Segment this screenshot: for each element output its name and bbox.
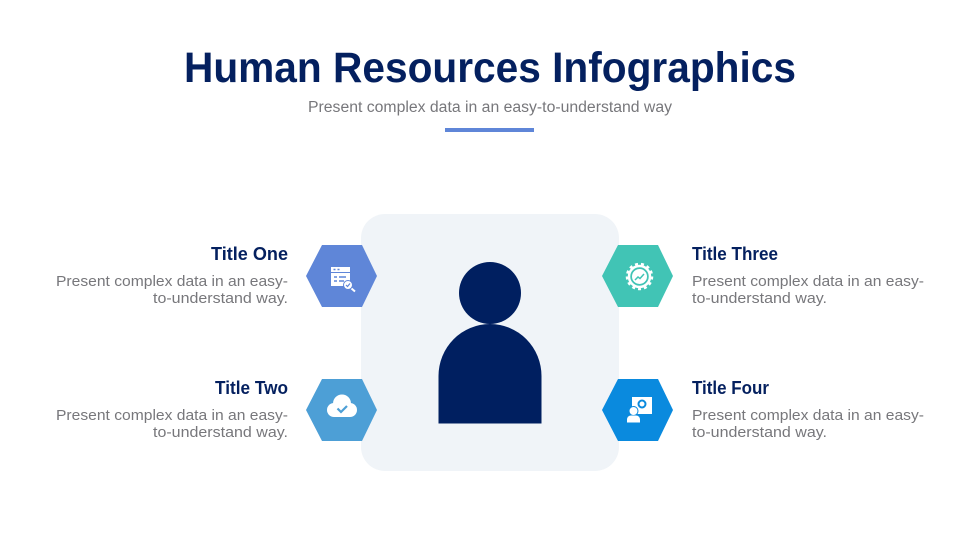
heading: Title Four: Title Four — [692, 378, 769, 398]
text: description one — [56, 273, 288, 307]
block: Title Three — [692, 244, 924, 307]
text: description one: to-understand way. — [153, 290, 288, 307]
text: description four — [692, 407, 924, 441]
text: description three: Present complex data in an easy- — [692, 273, 924, 290]
text: description four: Present complex data in an easy- — [692, 407, 924, 424]
icon: person — [438, 262, 542, 424]
heading: Title One: Title One — [211, 244, 288, 264]
block: Title One — [56, 244, 288, 307]
subtitle: Present complex data in an easy-to-understand way — [308, 99, 672, 116]
text: description one: Present complex data in an easy- — [56, 273, 288, 290]
heading: Title Three: Title Three — [692, 244, 778, 264]
text: description two: to-understand way. — [153, 424, 288, 441]
title: Human Resources Infographics — [184, 44, 796, 92]
text: description three — [692, 273, 924, 307]
heading: Title Two: Title Two — [215, 378, 288, 398]
text: description two: Present complex data in an easy- — [56, 407, 288, 424]
block: Title Two — [56, 378, 288, 441]
title underline accent — [445, 128, 534, 132]
panel: center card — [361, 214, 619, 471]
hexagon icon: cloud check — [306, 379, 377, 441]
text: description three: to-understand way. — [692, 290, 827, 307]
hexagon icon: presenter with gear board — [602, 379, 673, 441]
block: Title Four — [692, 378, 924, 441]
hexagon icon: growth gear — [602, 245, 673, 307]
hexagon icon: checklist search — [306, 245, 377, 307]
text: description two — [56, 407, 288, 441]
text: description four: to-understand way. — [692, 424, 827, 441]
